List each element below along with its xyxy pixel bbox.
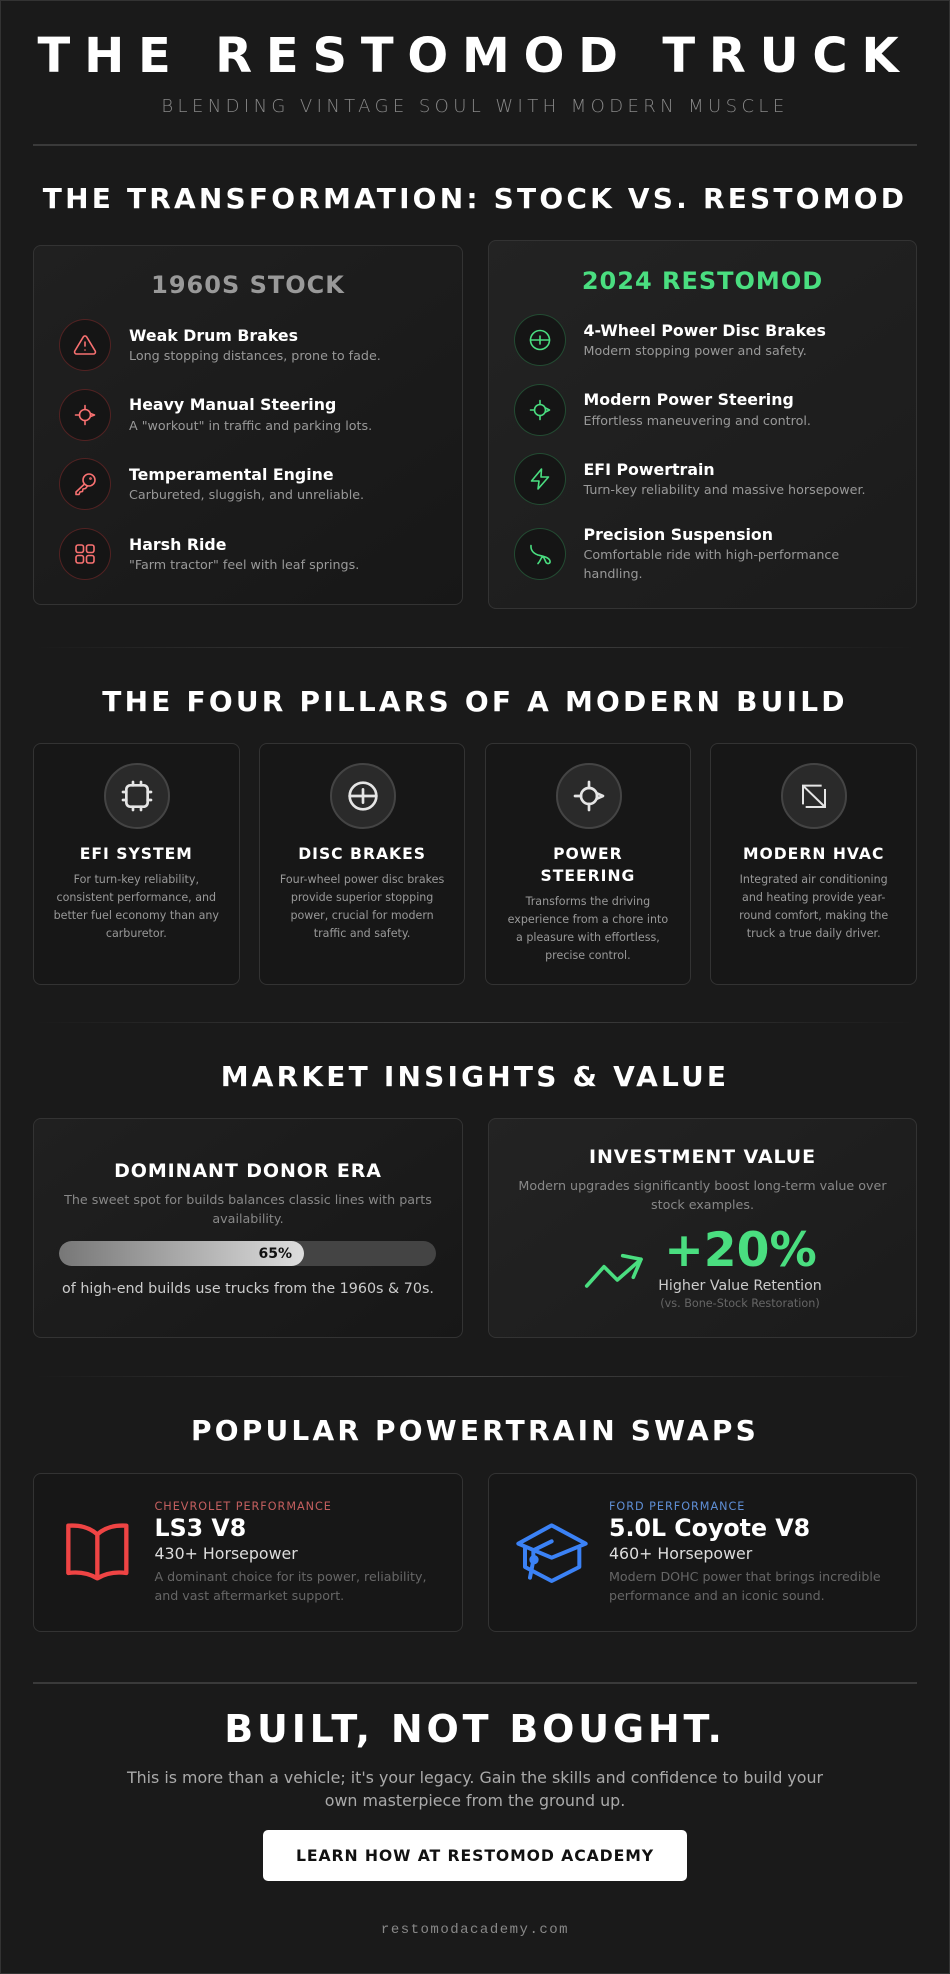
item: heavy manual steering: Heavy Manual Steering xyxy=(129,395,336,414)
card: modern HVAC: and heating provide year- xyxy=(742,891,885,904)
icon: steering xyxy=(514,384,566,436)
description: performance and an iconic sound. xyxy=(609,1588,825,1603)
CTA button: LEARN HOW AT RESTOMOD ACADEMY xyxy=(296,1846,654,1864)
item: temperamental engine xyxy=(59,458,364,510)
heading: market insights: MARKET INSIGHTS & VALUE xyxy=(221,1060,729,1093)
CTA text: This is more than a vehicle; it's your legacy. Gain the skills and confidence to build your xyxy=(127,1768,823,1787)
description: and vast aftermarket support. xyxy=(154,1588,344,1603)
heading: powertrain swaps: POPULAR POWERTRAIN SWAPS xyxy=(191,1414,759,1447)
panel heading: 2024 restomod: 2024 RESTOMOD xyxy=(582,267,823,295)
card: Coyote V8 xyxy=(488,1473,917,1632)
description: Modern DOHC power that brings incredible xyxy=(609,1569,881,1584)
panel: investment value xyxy=(488,1118,917,1338)
card: power steering: POWER xyxy=(553,844,623,862)
icon: book xyxy=(66,1523,128,1580)
card: EFI system xyxy=(33,743,240,985)
item: power steering: Modern Power Steering xyxy=(584,390,794,409)
item: weak drum brakes: Long stopping distances, prone to fade. xyxy=(129,348,381,363)
label: CHEVROLET PERFORMANCE xyxy=(154,1500,332,1513)
progress fill: 65% xyxy=(258,1246,292,1262)
icon: warning triangle xyxy=(59,319,111,371)
panel: 2024 restomod xyxy=(488,240,917,609)
description xyxy=(154,1569,427,1603)
item: weak drum brakes xyxy=(59,319,381,371)
card: disc brakes: provide superior stopping xyxy=(291,891,433,904)
label: FORD PERFORMANCE xyxy=(609,1500,745,1513)
subtitle: BLENDING VINTAGE SOUL WITH MODERN MUSCLE xyxy=(161,96,789,117)
item: weak drum brakes: Weak Drum Brakes xyxy=(129,326,298,344)
panel: 1960s stock xyxy=(33,245,463,605)
card: modern HVAC: MODERN HVAC xyxy=(743,844,884,862)
heading: the transformation: THE TRANSFORMATION: STOCK VS. RESTOMOD xyxy=(43,182,907,215)
item: EFI powertrain xyxy=(514,453,866,505)
icon: graduation cap xyxy=(516,1523,588,1583)
item: precision suspension xyxy=(514,524,839,581)
stat: +20%: +20% xyxy=(664,1223,817,1278)
item: harsh ride xyxy=(59,528,359,580)
item: power steering: Effortless maneuvering and control. xyxy=(584,413,811,428)
icon: disc xyxy=(330,763,396,829)
engine name: 5.0L Coyote V8 xyxy=(609,1514,810,1542)
card: power steering: experience from a chore into xyxy=(508,913,668,926)
card: power steering: a pleasure with effortless, xyxy=(516,931,660,944)
item: temperamental engine: Temperamental Engine xyxy=(129,464,334,484)
progress fill xyxy=(59,1241,304,1266)
CTA text xyxy=(126,1768,823,1810)
card: power steering: Transforms the driving xyxy=(526,895,650,908)
item: precision suspension: handling. xyxy=(584,566,643,581)
card: disc brakes: Four-wheel power disc brakes xyxy=(280,873,444,886)
icon: hvac xyxy=(781,763,847,829)
item: heavy manual steering xyxy=(59,389,372,441)
card: power steering xyxy=(485,743,691,985)
item: EFI powertrain: Turn-key reliability and massive horsepower. xyxy=(584,482,866,497)
item: EFI powertrain: EFI Powertrain xyxy=(584,460,715,478)
icon: grid xyxy=(59,528,111,580)
title: THE RESTOMOD TRUCK xyxy=(38,28,912,84)
CTA text: own masterpiece from the ground up. xyxy=(325,1791,625,1810)
icon: steering xyxy=(556,763,622,829)
stat note: (vs. Bone-Stock Restoration) xyxy=(660,1297,820,1310)
card: LS3 V8 xyxy=(33,1473,463,1632)
item: harsh ride: Harsh Ride xyxy=(129,534,226,554)
card: EFI system: consistent performance, and xyxy=(56,891,216,904)
engine name: LS3 V8 xyxy=(154,1514,246,1542)
description: A dominant choice for its power, reliability, xyxy=(154,1569,427,1584)
progress bar: 65% xyxy=(59,1241,436,1266)
icon: disc xyxy=(514,314,566,366)
description xyxy=(609,1569,881,1603)
item: temperamental engine: Carbureted, sluggish, and unreliable. xyxy=(129,487,364,502)
card: power steering: STEERING xyxy=(540,866,635,884)
footer url: restomodacademy.com xyxy=(381,1922,569,1938)
item: precision suspension: Precision Suspension xyxy=(584,524,773,544)
item: disc brakes: Modern stopping power and safety. xyxy=(584,343,807,358)
item: power steering xyxy=(514,384,811,436)
card: disc brakes: DISC BRAKES xyxy=(298,844,426,862)
heading: four pillars: THE FOUR PILLARS OF A MODERN BUILD xyxy=(102,685,848,718)
heading: INVESTMENT VALUE xyxy=(589,1146,816,1168)
card: modern HVAC: truck a true daily driver. xyxy=(747,927,881,940)
stat label: Higher Value Retention xyxy=(658,1278,822,1294)
card: disc brakes: power, crucial for modern xyxy=(290,909,434,922)
item: precision suspension: Comfortable ride with high-performance xyxy=(584,547,839,562)
caption: of high-end builds use trucks from the 1960s & 70s. xyxy=(62,1281,434,1297)
card: EFI system: carburetor. xyxy=(106,927,167,940)
card: disc brakes: traffic and safety. xyxy=(314,927,410,940)
card: modern HVAC: Integrated air conditioning xyxy=(740,873,888,886)
card: EFI system: EFI SYSTEM xyxy=(80,844,193,862)
card: modern HVAC: round comfort, making the xyxy=(739,909,888,922)
item: disc brakes xyxy=(514,314,826,366)
horsepower: 430+ Horsepower xyxy=(154,1544,298,1562)
item: disc brakes: 4-Wheel Power Disc Brakes xyxy=(584,320,826,340)
icon: trending arrow xyxy=(584,1254,643,1288)
item: harsh ride: "Farm tractor" feel with leaf springs. xyxy=(129,557,359,572)
panel: dominant donor era xyxy=(33,1118,463,1338)
CTA button xyxy=(263,1830,687,1880)
icon: bolt xyxy=(514,453,566,505)
icon: key xyxy=(59,458,111,510)
icon: chip xyxy=(104,763,170,829)
description: The sweet spot for builds balances classic lines with parts availability. xyxy=(64,1192,432,1226)
icon: suspension xyxy=(514,528,566,580)
card: power steering: precise control. xyxy=(545,949,631,962)
CTA heading: BUILT, NOT BOUGHT. xyxy=(224,1707,726,1751)
card: EFI system: For turn-key reliability, xyxy=(74,873,199,886)
card: EFI system: better fuel economy than any xyxy=(54,909,219,922)
card: disc brakes xyxy=(259,743,465,985)
item: heavy manual steering: A "workout" in traffic and parking lots. xyxy=(129,418,372,432)
heading: DOMINANT DONOR ERA xyxy=(114,1160,382,1182)
card: modern HVAC xyxy=(710,743,917,985)
description: Modern upgrades significantly boost long-term value over stock examples. xyxy=(518,1178,887,1212)
icon: steering xyxy=(59,388,111,440)
horsepower: 460+ Horsepower xyxy=(609,1544,752,1562)
panel heading: 1960s stock: 1960S STOCK xyxy=(151,271,345,299)
panel: four pillars xyxy=(33,743,917,985)
